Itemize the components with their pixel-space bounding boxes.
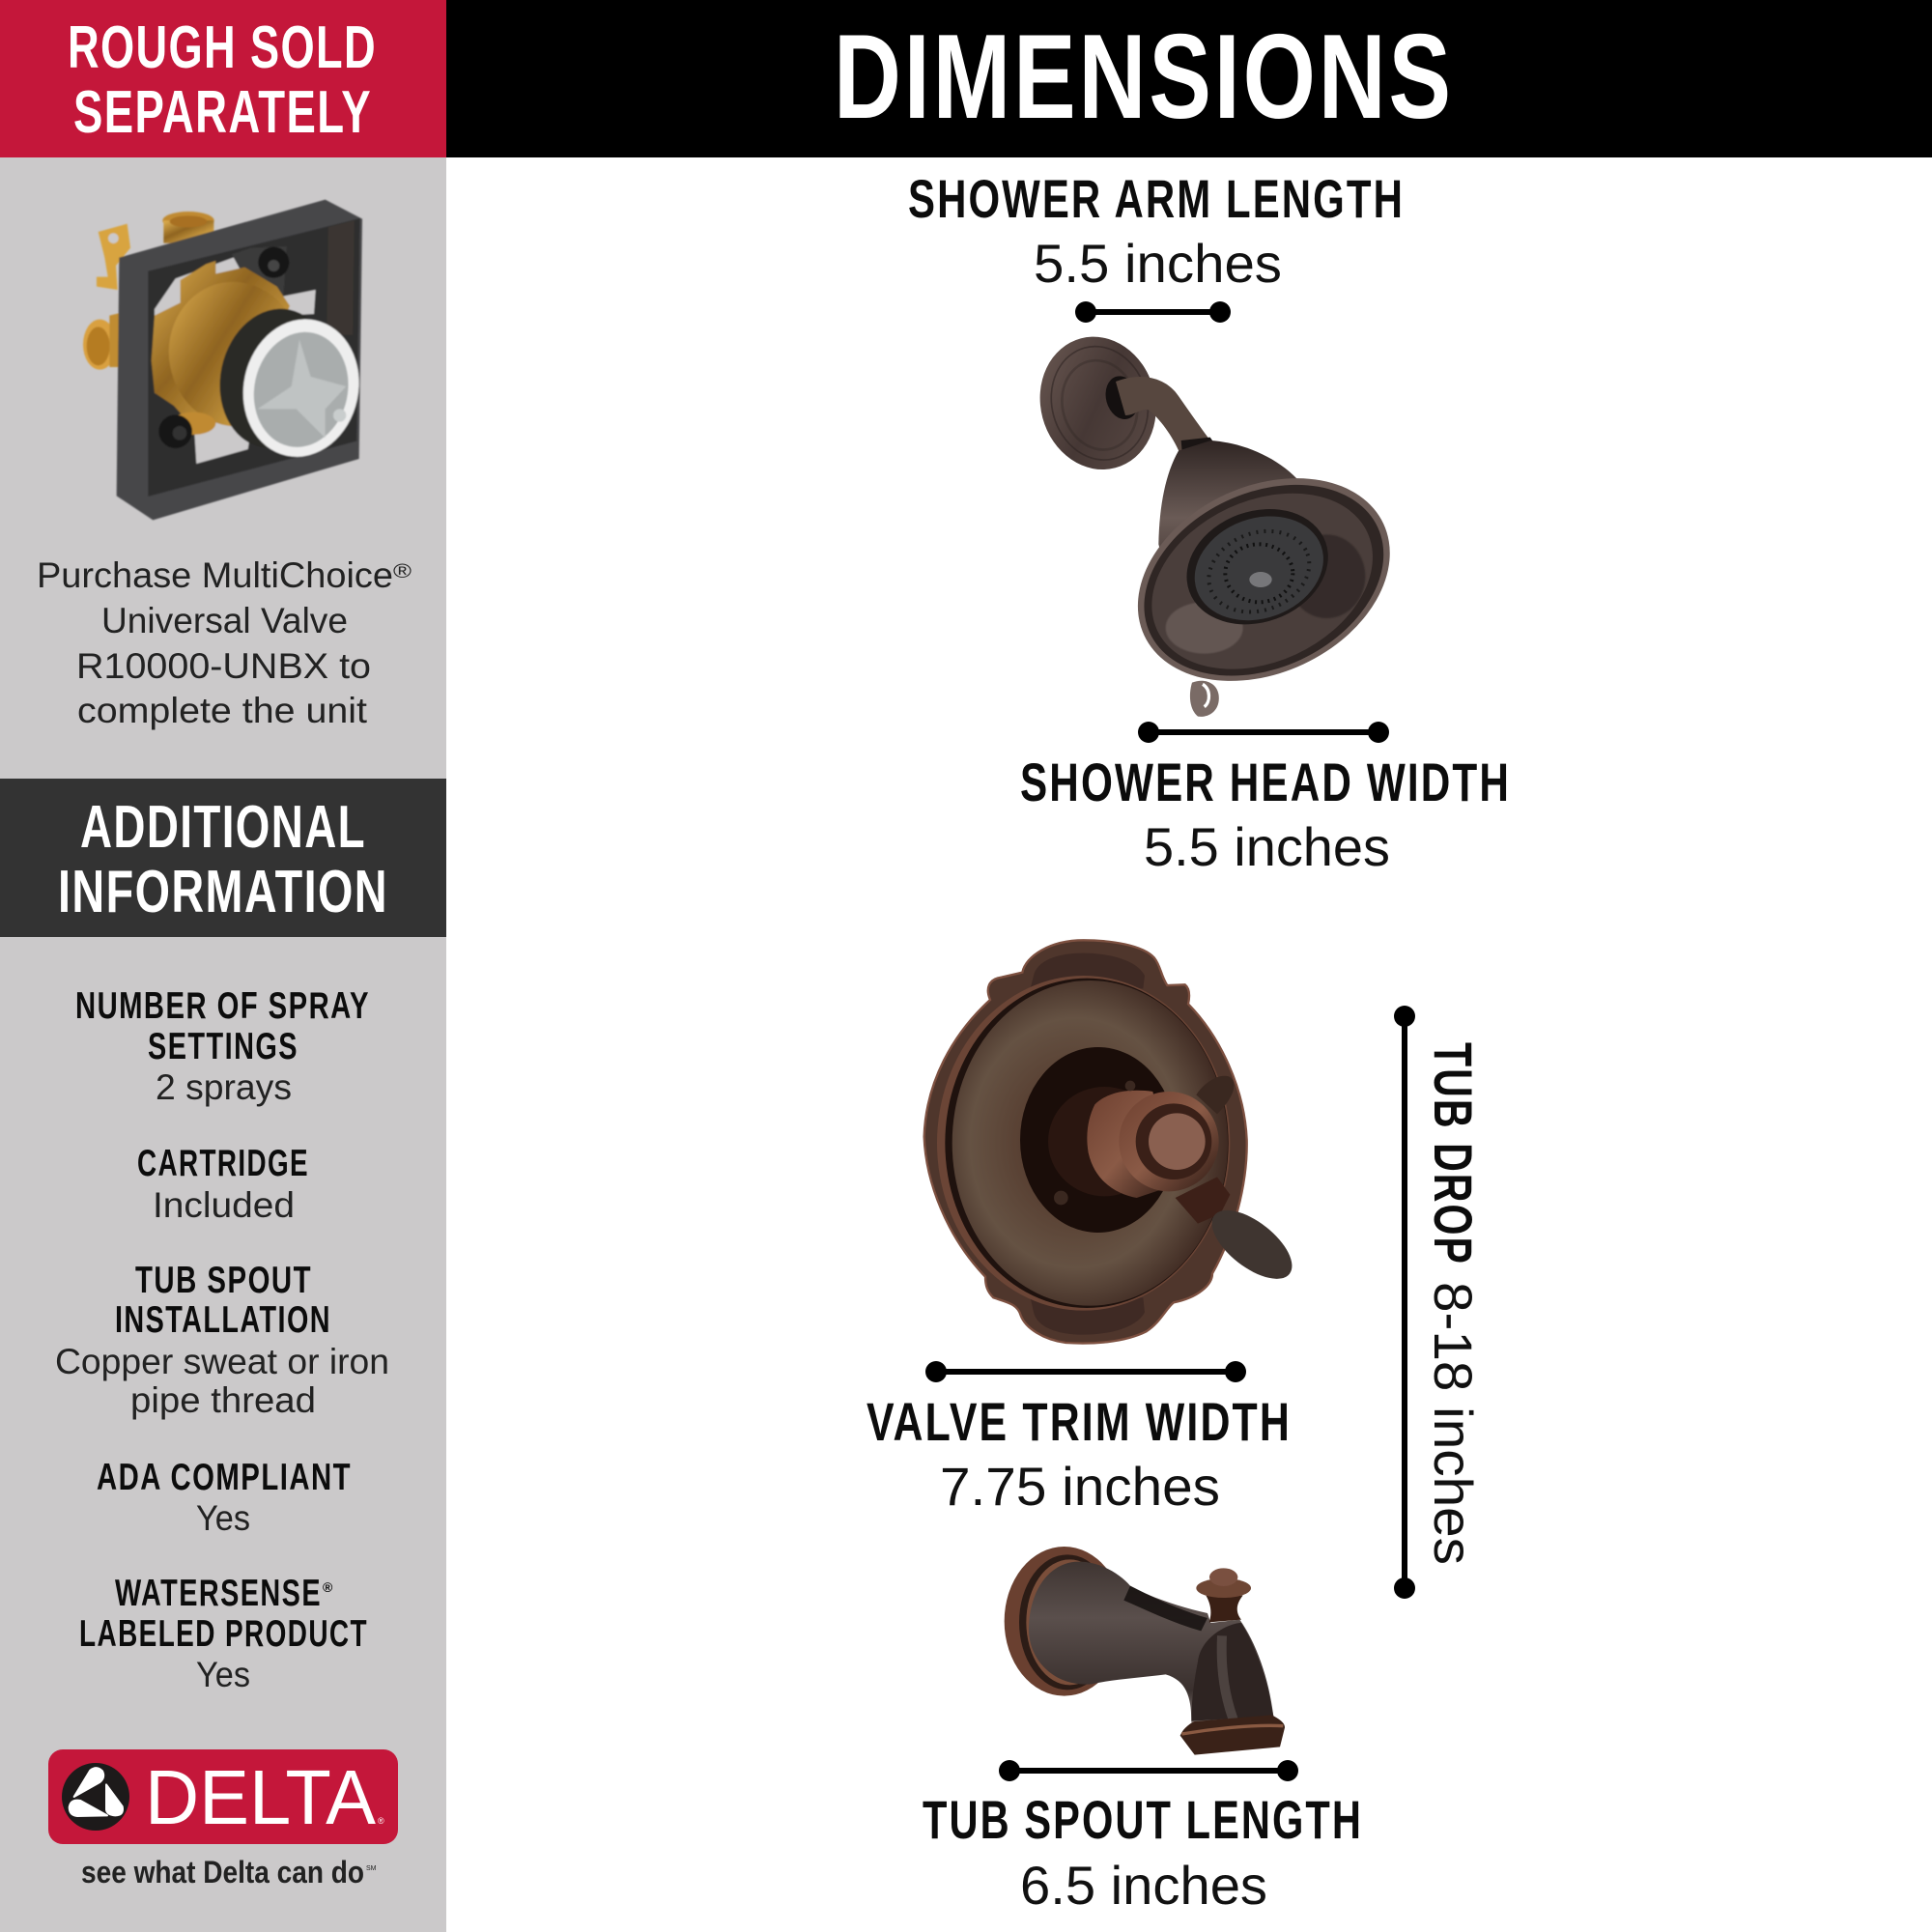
label: shower arm length: SHOWER ARM LENGTH (908, 168, 1405, 229)
label: tub drop (1423, 1042, 1484, 1565)
spec: tub spout installation: INSTALLATION (115, 1299, 331, 1341)
label: tub spout length: TUB SPOUT LENGTH (923, 1789, 1363, 1850)
spec: number of spray settings: 2 sprays (156, 1067, 292, 1107)
tagline: see what delta can do: see what Delta can do (81, 1855, 364, 1889)
text block: purchase valve note: Purchase MultiChoice (37, 555, 393, 595)
logo: delta (48, 1749, 398, 1844)
title: dimensions: DIMENSIONS (834, 11, 1454, 144)
spec: tub spout installation (55, 1260, 389, 1420)
text block: purchase valve note: ® (393, 561, 412, 582)
icon: tub spout photo (1005, 1547, 1285, 1755)
panel: rough sold separately banner: ROUGH SOLD (68, 14, 377, 81)
text block: purchase valve note (37, 555, 412, 730)
spec: ada compliant: ADA COMPLIANT (97, 1457, 352, 1498)
text block: purchase valve note: R10000-UNBX to (76, 646, 371, 686)
dimension line: tub drop (1394, 1006, 1415, 1599)
label: tub spout length: 6.5 inches (1020, 1855, 1267, 1916)
spec: watersense labeled product: WATERSENSE (115, 1573, 322, 1614)
panel: rough sold separately banner: SEPARATELY (73, 79, 372, 146)
heading: additional information (0, 779, 446, 937)
label: tub drop: TUB DROP (1423, 1042, 1484, 1265)
icon: rough-in valve photo (83, 200, 372, 520)
label: tub spout length (923, 1789, 1363, 1916)
spec: ada compliant: Yes (196, 1498, 250, 1538)
spec: tub spout installation: pipe thread (130, 1380, 316, 1420)
spec: tub spout installation: Copper sweat or iron (55, 1342, 389, 1381)
spec: ada compliant (97, 1457, 352, 1538)
dimension line: shower head (1138, 722, 1389, 743)
spec: watersense labeled product: LABELED PRODUCT (79, 1613, 368, 1655)
panel: rough sold separately banner (0, 0, 446, 157)
label: valve trim width: VALVE TRIM WIDTH (867, 1391, 1292, 1452)
icon: shower head photo (1025, 324, 1423, 720)
spec: watersense labeled product: ® (323, 1579, 333, 1595)
dimension line: tub spout (999, 1760, 1298, 1781)
dimension line: valve trim (925, 1361, 1246, 1382)
label: tub drop: 8-18 inches (1423, 1282, 1484, 1565)
spec: watersense labeled product (79, 1573, 368, 1694)
text block: purchase valve note: complete the unit (77, 691, 368, 730)
label: shower arm length: 5.5 inches (1034, 233, 1282, 294)
spec: cartridge: Included (153, 1185, 295, 1225)
heading: additional information: INFORMATION (58, 859, 388, 925)
spec: number of spray settings: NUMBER OF SPRAY (75, 985, 370, 1027)
logo: delta: DELTA (145, 1754, 377, 1840)
spec: cartridge (137, 1143, 309, 1225)
spec: number of spray settings: SETTINGS (148, 1026, 298, 1067)
spec: number of spray settings (75, 985, 370, 1107)
label: shower arm length (908, 168, 1405, 294)
title: dimensions (446, 0, 1932, 157)
tagline: see what delta can do: SM (366, 1865, 377, 1872)
heading: additional information: ADDITIONAL (80, 794, 366, 861)
logo: delta: ® (378, 1816, 384, 1826)
left sidebar panel (0, 0, 446, 1932)
icon: valve trim photo (924, 940, 1303, 1344)
dimension line: shower arm (1075, 301, 1231, 323)
label: shower head width: SHOWER HEAD WIDTH (1020, 752, 1511, 812)
spec: tub spout installation: TUB SPOUT (135, 1260, 312, 1301)
label: shower head width: 5.5 inches (1144, 816, 1390, 877)
label: shower head width (1020, 752, 1511, 877)
text block: purchase valve note: Universal Valve (101, 601, 348, 640)
label: valve trim width: 7.75 inches (940, 1456, 1220, 1517)
spec: cartridge: CARTRIDGE (137, 1143, 309, 1184)
label: valve trim width (867, 1391, 1292, 1517)
spec: watersense labeled product: Yes (196, 1655, 250, 1694)
